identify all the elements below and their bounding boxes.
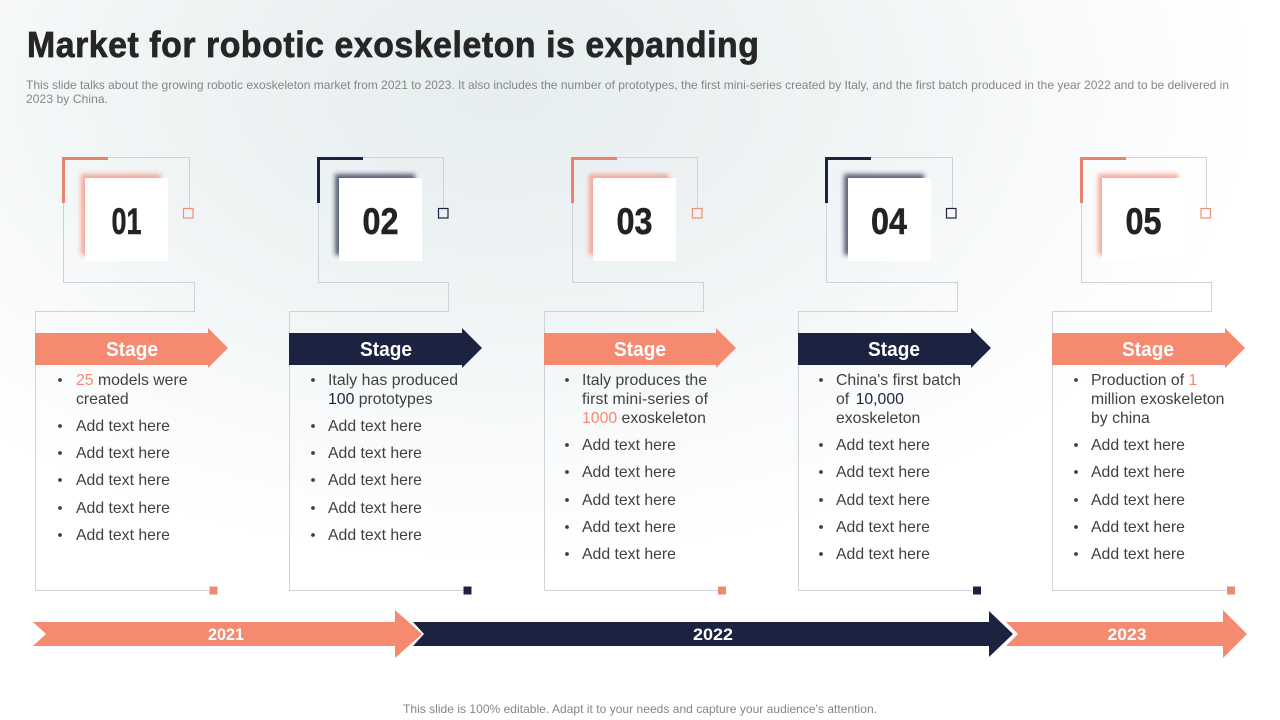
bullet list: Add text here (328, 418, 422, 435)
bullet list: Add text here (1091, 546, 1185, 563)
stage arrow: Stage (868, 339, 920, 361)
bullet list: Add text here (1091, 492, 1185, 509)
corner marker (973, 586, 981, 594)
timeline arrow: 2022: 2022 (693, 625, 733, 644)
bullet list: Add text here (1091, 437, 1185, 454)
bullet list: Add text here (582, 464, 676, 481)
bullet list: million exoskeleton (1091, 391, 1224, 408)
connector square (184, 208, 193, 218)
stage arrow: Stage (106, 339, 158, 361)
timeline arrow: 2023: 2023 (1108, 625, 1146, 644)
number card (1102, 178, 1185, 261)
stage arrow (544, 328, 736, 368)
description text (26, 78, 1229, 106)
bullet list: by china (1091, 410, 1150, 427)
bullet list: 1000 exoskeleton (582, 410, 706, 427)
connector square (438, 208, 448, 218)
timeline arrow: 2022 (413, 611, 1013, 657)
panel: stage 05 (1052, 158, 1245, 594)
bullet list (311, 372, 458, 544)
bullet list: 100 prototypes (328, 391, 433, 408)
bracket accent (318, 158, 363, 203)
number card (339, 178, 422, 261)
stage arrow (289, 328, 482, 368)
bullet list: Add text here (836, 464, 930, 481)
stage arrow (1052, 328, 1245, 368)
stage arrow: Stage (1122, 339, 1174, 361)
number card (848, 178, 931, 261)
bullet list: Add text here (582, 437, 676, 454)
bullet list: China's first batch (836, 372, 961, 389)
number card (85, 178, 168, 261)
corner marker (1227, 586, 1235, 594)
bullet list: Add text here (328, 527, 422, 544)
bullet list: Italy produces the (582, 372, 707, 389)
connector square (946, 208, 956, 218)
bullet list: Add text here (836, 519, 930, 536)
title: Market for robotic exoskeleton is expanding (27, 25, 759, 65)
bullet list: Add text here (76, 418, 170, 435)
number card: 02 (362, 201, 398, 242)
bullet list: Add text here (76, 527, 170, 544)
corner marker (718, 586, 726, 594)
bullet list: 25 models were (76, 372, 188, 389)
bullet list (1074, 372, 1224, 563)
bullet list: Add text here (582, 546, 676, 563)
bullet list: exoskeleton (836, 410, 920, 427)
bullet list (58, 372, 188, 544)
stage arrow (798, 328, 991, 368)
timeline arrow: 2023 (1006, 610, 1247, 658)
corner marker (210, 586, 218, 594)
bullet list: Add text here (1091, 464, 1185, 481)
bullet list: created (76, 391, 129, 408)
bracket accent (826, 158, 871, 203)
panel: stage 04 (798, 158, 991, 594)
connector square (692, 208, 702, 218)
connector square (1201, 208, 1210, 218)
bullet list: Add text here (836, 437, 930, 454)
stage arrow: Stage (360, 339, 412, 361)
bullet list: Add text here (836, 546, 930, 563)
bullet list: Add text here (76, 472, 170, 489)
description text: 2023 by China. (26, 92, 108, 106)
number card: 01 (112, 201, 142, 242)
bullet list: Production of 1 (1091, 372, 1197, 389)
description text: This slide talks about the growing robotic exoskeleton market from 2021 to 2023. It also includes the number of prototypes, the first mini-series created by Italy, and the first batch produced in the year 2022 and to be delivered in (26, 78, 1229, 92)
bracket accent (64, 158, 108, 203)
corner marker (464, 586, 472, 594)
panel: stage 02 (289, 158, 482, 594)
bullet list: Add text here (836, 492, 930, 509)
bullet list: Add text here (328, 445, 422, 462)
bullet list: Add text here (328, 472, 422, 489)
timeline arrow: 2021: 2021 (208, 625, 244, 644)
bullet list: Add text here (76, 445, 170, 462)
bullet list: Add text here (328, 500, 422, 517)
timeline arrow: 2021 (33, 610, 422, 658)
bullet list (565, 372, 709, 563)
number card: 04 (871, 201, 907, 242)
bullet list (819, 372, 961, 563)
stage arrow: Stage (614, 339, 666, 361)
bullet list: first mini-series of (582, 391, 709, 408)
bullet list: Add text here (582, 519, 676, 536)
panel: stage 01 (35, 158, 228, 594)
bullet list: Italy has produced (328, 372, 458, 389)
number card: 03 (616, 201, 652, 242)
bracket accent (1082, 158, 1126, 203)
bullet list: of 10,000 (836, 391, 904, 408)
bullet list: Add text here (582, 492, 676, 509)
panel: stage 03 (544, 158, 736, 594)
stage arrow (35, 328, 228, 368)
footer note: This slide is 100% editable. Adapt it to your needs and capture your audience's attention. (403, 702, 877, 716)
number card (593, 178, 676, 261)
bullet list: Add text here (76, 500, 170, 517)
bracket accent (572, 158, 617, 203)
number card: 05 (1126, 201, 1162, 242)
bullet list: Add text here (1091, 519, 1185, 536)
